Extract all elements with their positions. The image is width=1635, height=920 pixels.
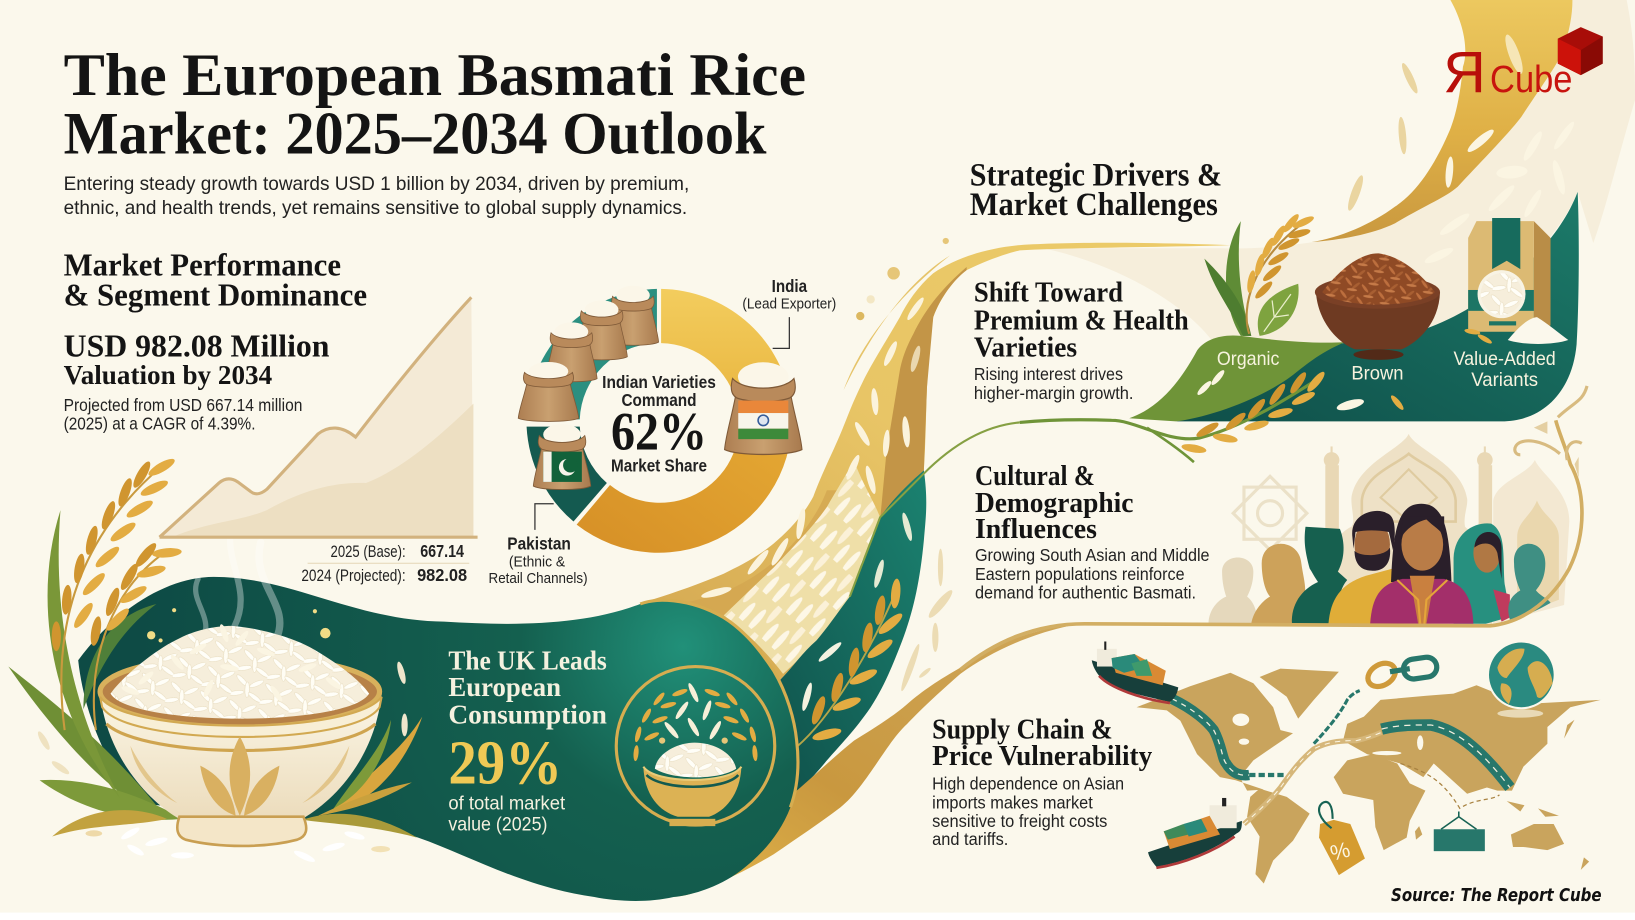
- text: UK leads: of total market: [448, 792, 566, 814]
- text: UK leads: European: [448, 672, 561, 702]
- icon: value-added rice bag: [1464, 218, 1568, 345]
- stat: valuation: (2025) at a CAGR of 4.39%.: [64, 414, 255, 434]
- subtitle: ethnic, and health trends, yet remains sensitive to global supply dynamics.: [64, 197, 687, 219]
- text: UK leads: value (2025): [448, 813, 547, 835]
- icon: cargo container: [1434, 812, 1485, 851]
- rice pile: [111, 626, 369, 719]
- label: value-added variants: Value-Added: [1454, 348, 1556, 370]
- source: Source: The Report Cube: [1391, 886, 1602, 906]
- heading: strategic drivers: [970, 157, 1222, 222]
- label: brown: Brown: [1351, 363, 1404, 385]
- text: supply chain: Price Vulnerability: [932, 741, 1152, 772]
- label: India: India: [772, 276, 807, 296]
- text: supply chain: [932, 714, 1152, 849]
- text: shift toward premium: Rising interest drives: [974, 364, 1123, 384]
- label: Pakistan: Retail Channels): [489, 570, 588, 587]
- text: supply chain: and tariffs.: [932, 829, 1008, 849]
- label: Pakistan: [489, 504, 588, 587]
- label: organic: Organic: [1217, 348, 1280, 370]
- chart table: 2025 (Base):: [331, 543, 406, 561]
- big teal wave: [78, 577, 798, 901]
- title: The European Basmati Rice: [64, 42, 806, 109]
- world map: [1092, 640, 1601, 883]
- mosque backdrop: [1233, 434, 1569, 624]
- teal silhouette: [1292, 527, 1347, 624]
- label: Pakistan: Pakistan: [507, 534, 571, 554]
- glow dots: [147, 608, 331, 643]
- logo: RCube: Cube: [1490, 58, 1572, 100]
- text: shift toward premium: Varieties: [974, 333, 1077, 364]
- text: supply chain: High dependence on Asian: [932, 774, 1124, 794]
- map cut-outs: [1233, 713, 1423, 755]
- decorative top-right beige sweep: [1043, 0, 1635, 343]
- left grass and wheat: [8, 456, 182, 837]
- logo: RCube: Я: [1443, 40, 1486, 105]
- 62 percent remainder: [577, 398, 792, 553]
- rim and inner bowl: [100, 656, 380, 727]
- text: UK leads: Consumption: [448, 699, 607, 729]
- stat: valuation: Valuation by 2034: [64, 360, 273, 390]
- icon: container ship south: [1148, 798, 1242, 868]
- icon: organic rice plant: [1204, 212, 1315, 336]
- text: supply chain: sensitive to freight costs: [932, 811, 1107, 831]
- green hill: [1129, 335, 1345, 421]
- stat: valuation: USD 982.08 Million: [64, 329, 330, 364]
- text: UK leads: [448, 646, 607, 835]
- pale rice mass: [724, 460, 880, 674]
- Pakistan sack: [533, 424, 591, 490]
- loose grains: [700, 296, 926, 600]
- lower tan edge: [667, 490, 850, 652]
- text: cultural and demographic: demand for authentic Basmati.: [975, 583, 1196, 603]
- bowl leaf motif: [130, 736, 349, 816]
- illustration: people and mosque: [960, 386, 1587, 670]
- heading: market performance: & Segment Dominance: [64, 278, 367, 313]
- panel: shift toward premium varieties: [1129, 192, 1579, 421]
- donut centre text: Command: [621, 390, 697, 410]
- label: Pakistan: (Ethnic &: [509, 553, 565, 570]
- icon: brown rice bowl: [1315, 253, 1440, 360]
- wheat stem under panel: [1020, 370, 1327, 462]
- label: value-added variants: [1454, 348, 1556, 391]
- text: cultural and demographic: Influences: [975, 514, 1097, 545]
- gold frame line: [960, 420, 1582, 670]
- title: Market: 2025–2034 Outlook: [64, 100, 767, 167]
- text: cultural and demographic: Eastern populations reinforce: [975, 564, 1185, 584]
- ribbon sliver: [844, 256, 950, 390]
- central gold ribbon with rice grains: [652, 243, 1230, 680]
- light teal silhouette: [1508, 544, 1551, 620]
- text: cultural and demographic: Cultural &: [975, 461, 1095, 492]
- light silhouette: [1209, 558, 1258, 624]
- title: [64, 42, 806, 167]
- other exporters: [527, 289, 657, 419]
- label: value-added variants: Variants: [1471, 369, 1538, 391]
- donut centre text: Market Share: [611, 455, 707, 475]
- label: India: (Lead Exporter): [742, 296, 836, 313]
- stat: valuation: Projected from USD 667.14 million: [64, 395, 302, 415]
- teal background panel: [1176, 192, 1579, 421]
- chart table: 2024 (Projected):: [301, 567, 406, 585]
- icon: price tag: %: [1327, 837, 1353, 866]
- donut chart: [518, 286, 802, 553]
- icon: UK medallion: [616, 667, 775, 826]
- ornament leaves: [1515, 386, 1587, 460]
- continents: [1137, 669, 1601, 883]
- steam: [196, 511, 280, 638]
- India sack: [725, 362, 802, 454]
- central woman: [1370, 504, 1473, 624]
- loose pile grains: [121, 623, 343, 703]
- floating pale grains: [899, 549, 955, 692]
- lower tan ribbon: [667, 624, 1080, 897]
- woman in teal scarf: [1454, 523, 1510, 624]
- donut centre text: Indian Varieties: [602, 372, 716, 392]
- logo: RCube: [1443, 27, 1603, 105]
- text: UK leads: The UK Leads: [448, 646, 607, 676]
- text: supply chain: imports makes market: [932, 792, 1093, 812]
- area chart: [160, 297, 478, 537]
- text: cultural and demographic: Demographic: [975, 488, 1133, 519]
- man in yellow: [1328, 511, 1402, 624]
- heading: market performance: Market Performance: [64, 247, 341, 282]
- donut centre text: 62%: [611, 402, 707, 462]
- tan silhouette: [1251, 544, 1305, 624]
- text: UK leads: 29%: [448, 727, 562, 797]
- India segment: [661, 289, 790, 406]
- floating rice grains, top right: [856, 33, 1577, 320]
- right grass: [302, 717, 422, 838]
- spilled grains: [36, 661, 408, 864]
- text: shift toward premium: Shift Toward: [974, 277, 1123, 308]
- bowl body: [100, 694, 382, 819]
- icon: broken chain: [1364, 656, 1438, 691]
- text: cultural and demographic: Growing South Asian and Middle: [975, 545, 1210, 565]
- donut centre text: [602, 372, 716, 475]
- text: shift toward premium: [974, 277, 1189, 403]
- gold edge of the wave: [640, 600, 798, 807]
- chart table: 667.14: [420, 541, 464, 561]
- teal strip with wheat: [761, 422, 1020, 796]
- panel grains: [1196, 369, 1405, 413]
- sacks: [607, 286, 659, 345]
- icon: price tag: [1319, 802, 1365, 875]
- icon: globe: [1487, 640, 1556, 718]
- chart table: [301, 541, 469, 585]
- chart table: 982.08: [417, 565, 468, 585]
- heading: market performance: [64, 247, 367, 313]
- subtitle: [64, 173, 689, 219]
- top-right gold ribbon: [1312, 0, 1572, 242]
- icon: steaming rice bowl: [8, 456, 422, 864]
- Pakistan segment: [527, 427, 607, 522]
- label: India: [742, 276, 836, 348]
- subtitle: Entering steady growth towards USD 1 billion by 2034, driven by premium,: [64, 173, 689, 195]
- foot: [177, 817, 306, 846]
- text: cultural and demographic: [975, 461, 1210, 603]
- ribbon body: [652, 243, 1230, 680]
- faint mandala: [1233, 476, 1307, 550]
- routes: [1172, 691, 1510, 824]
- icon: container ship north: [1092, 641, 1178, 703]
- text: supply chain: Supply Chain &: [932, 714, 1113, 746]
- text: shift toward premium: Premium & Health: [974, 306, 1189, 337]
- heading: strategic drivers: Strategic Drivers &: [970, 157, 1222, 193]
- stat: valuation: [64, 329, 330, 434]
- heading: strategic drivers: Market Challenges: [970, 186, 1218, 222]
- tan strip: [880, 267, 967, 520]
- text: shift toward premium: higher-margin growth.: [974, 383, 1133, 403]
